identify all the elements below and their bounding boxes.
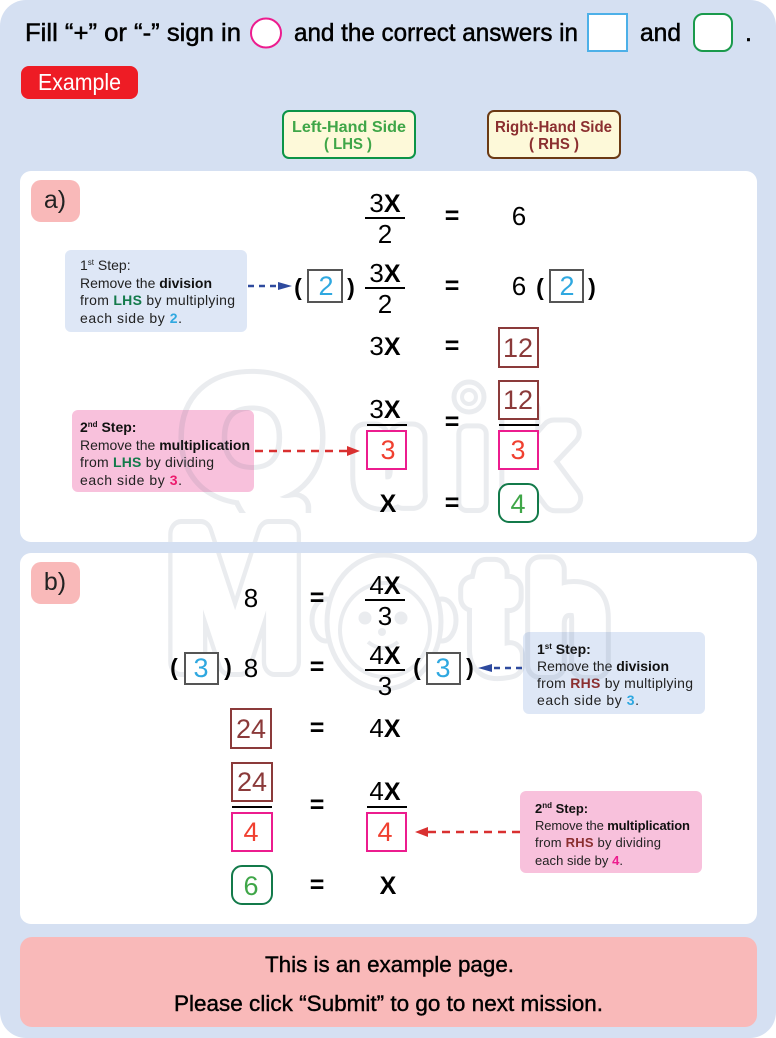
callout: b second step: from RHS by dividing — [535, 835, 661, 850]
equation a row 2: 6 — [512, 271, 526, 301]
equation a row 2: 2 — [318, 271, 334, 301]
equation b row 2: 3 — [378, 671, 392, 701]
equation a row 4: 3 — [510, 435, 526, 465]
equation a row 2: 2 — [559, 271, 575, 301]
arrow: a second step — [255, 446, 360, 456]
label: left-hand side: Left-Hand Side — [292, 119, 406, 136]
callout: b second step: Remove the multiplication — [535, 818, 690, 833]
equation b row 5 — [232, 866, 397, 904]
equation b row 2 — [170, 640, 474, 701]
equation a row 2: 2 — [378, 289, 392, 319]
callout: a second step: nd — [88, 420, 98, 429]
part label b — [31, 562, 80, 604]
callout: a second step: from LHS by dividing — [80, 454, 214, 470]
equation b row 5: 6 — [243, 871, 259, 901]
equation b row 5: = — [310, 871, 324, 899]
callout: b first step: st — [545, 642, 552, 651]
equation b row 2: ) — [466, 654, 474, 680]
equation b row 4: = — [310, 791, 324, 819]
callout: b second step: 2 — [535, 801, 542, 816]
instruction heading: . — [745, 19, 752, 47]
equation a row 2: ( — [536, 274, 544, 300]
label: left-hand side — [283, 111, 415, 158]
equation b row 3 — [231, 709, 401, 748]
example badge — [21, 66, 138, 99]
equation b row 4: 4 — [243, 817, 259, 847]
callout: a first step: st — [88, 258, 95, 267]
arrow: b first step — [478, 664, 522, 672]
callout: a first step: Remove the division — [80, 275, 212, 291]
instruction heading — [25, 19, 752, 47]
equation b row 4: 4 — [377, 817, 393, 847]
equation b row 2: 3 — [435, 653, 451, 683]
equation a row 3: = — [445, 332, 459, 360]
equation a row 1: 6 — [512, 201, 526, 231]
callout: b first step: Step: — [552, 641, 591, 657]
equation a row 2: ) — [347, 274, 355, 300]
equation b row 2: 3 — [193, 653, 209, 683]
part label b: b) — [44, 568, 66, 596]
callout: a second step: each side by 3. — [80, 472, 182, 488]
equation a row 4: 3 — [380, 435, 396, 465]
panel: b — [20, 553, 757, 924]
equation b row 2: = — [310, 653, 324, 681]
equation a row 4: = — [445, 408, 459, 436]
equation a row 1 — [365, 188, 526, 249]
equation a row 1: 2 — [378, 219, 392, 249]
equation a row 3: 3X — [369, 331, 401, 361]
equation b row 3: = — [310, 714, 324, 742]
callout: b second step: nd — [542, 801, 552, 810]
equation a row 4: 3X — [369, 394, 401, 424]
equation a row 2: ( — [294, 274, 302, 300]
equation a row 2: 3X — [369, 258, 401, 288]
example badge: Example — [38, 69, 121, 95]
callout: b second step: each side by 4. — [535, 853, 623, 868]
equation b row 3: 24 — [236, 714, 266, 744]
equation b row 4 — [232, 763, 407, 851]
icon: pink circle answer slot — [251, 18, 281, 48]
equation b row 1: 3 — [378, 601, 392, 631]
equation a row 2 — [294, 258, 596, 319]
label: right-hand side: ( RHS ) — [529, 136, 579, 153]
equation a row 4 — [367, 381, 539, 469]
label: left-hand side: ( LHS ) — [324, 136, 372, 153]
equation a row 4: 12 — [503, 385, 533, 415]
icon: green rounded answer slot — [694, 14, 732, 51]
equation a row 3: 12 — [503, 333, 533, 363]
equation b row 2: ( — [413, 654, 421, 680]
equation b row 1: 8 — [244, 583, 258, 613]
watermark: Quik Math — [168, 369, 611, 692]
instruction heading: and the correct answers in — [294, 19, 578, 47]
callout: a first step: each side by 2. — [80, 310, 182, 326]
label: right-hand side: Right-Hand Side — [495, 119, 612, 136]
equation b row 3: 4X — [369, 713, 401, 743]
equation b row 2: ) — [224, 654, 232, 680]
callout: a first step: Step: — [94, 257, 131, 273]
callout: a second step: 2 — [80, 419, 88, 435]
equation b row 2: 4X — [369, 640, 401, 670]
callout: a first step: from LHS by multiplying — [80, 292, 235, 308]
equation a row 2: = — [445, 272, 459, 300]
equation b row 1: = — [310, 584, 324, 612]
callout: a second step: Remove the multiplication — [80, 437, 250, 453]
callout: b first step: from RHS by multiplying — [537, 675, 693, 691]
equation a row 1: = — [445, 202, 459, 230]
callout: a second step: Step: — [98, 419, 136, 435]
icon: blue square answer slot — [588, 14, 627, 51]
equation b row 2: 8 — [244, 653, 258, 683]
equation a row 5: X — [380, 490, 397, 518]
part label a — [31, 180, 80, 222]
callout: b second step — [520, 791, 702, 873]
instruction heading: Fill “+” or “-” sign in — [25, 19, 241, 47]
closing note panel: Please click “Submit” to go to next mission. — [174, 991, 603, 1016]
equation b row 1 — [244, 570, 405, 631]
callout: b second step: Step: — [552, 801, 588, 816]
equation a row 5: = — [445, 489, 459, 517]
callout: b first step: each side by 3. — [537, 692, 639, 708]
equation a row 5: 4 — [510, 489, 526, 519]
instruction heading: and — [640, 19, 681, 47]
callout: b first step: Remove the division — [537, 658, 669, 674]
equation b row 4: 4X — [369, 776, 401, 806]
arrow: b second step — [415, 827, 520, 837]
callout: b first step — [523, 632, 705, 714]
equation b row 2: ( — [170, 654, 178, 680]
callout: a first step: 1 — [80, 257, 88, 273]
label: right-hand side — [488, 111, 620, 158]
equation a row 1: 3X — [369, 188, 401, 218]
closing note panel — [20, 937, 757, 1027]
equation a row 5 — [380, 484, 538, 522]
callout: b first step: 1 — [537, 641, 545, 657]
equation b row 1: 4X — [369, 570, 401, 600]
equation b row 5: X — [380, 872, 397, 900]
equation a row 2: ) — [588, 274, 596, 300]
part label a: a) — [44, 186, 66, 214]
equation b row 4: 24 — [237, 767, 267, 797]
panel: a — [20, 171, 757, 542]
arrow: a first step — [248, 282, 292, 290]
equation a row 3 — [369, 328, 538, 367]
closing note panel: This is an example page. — [265, 952, 514, 977]
callout: a first step — [65, 250, 247, 332]
callout: a second step — [72, 410, 254, 492]
